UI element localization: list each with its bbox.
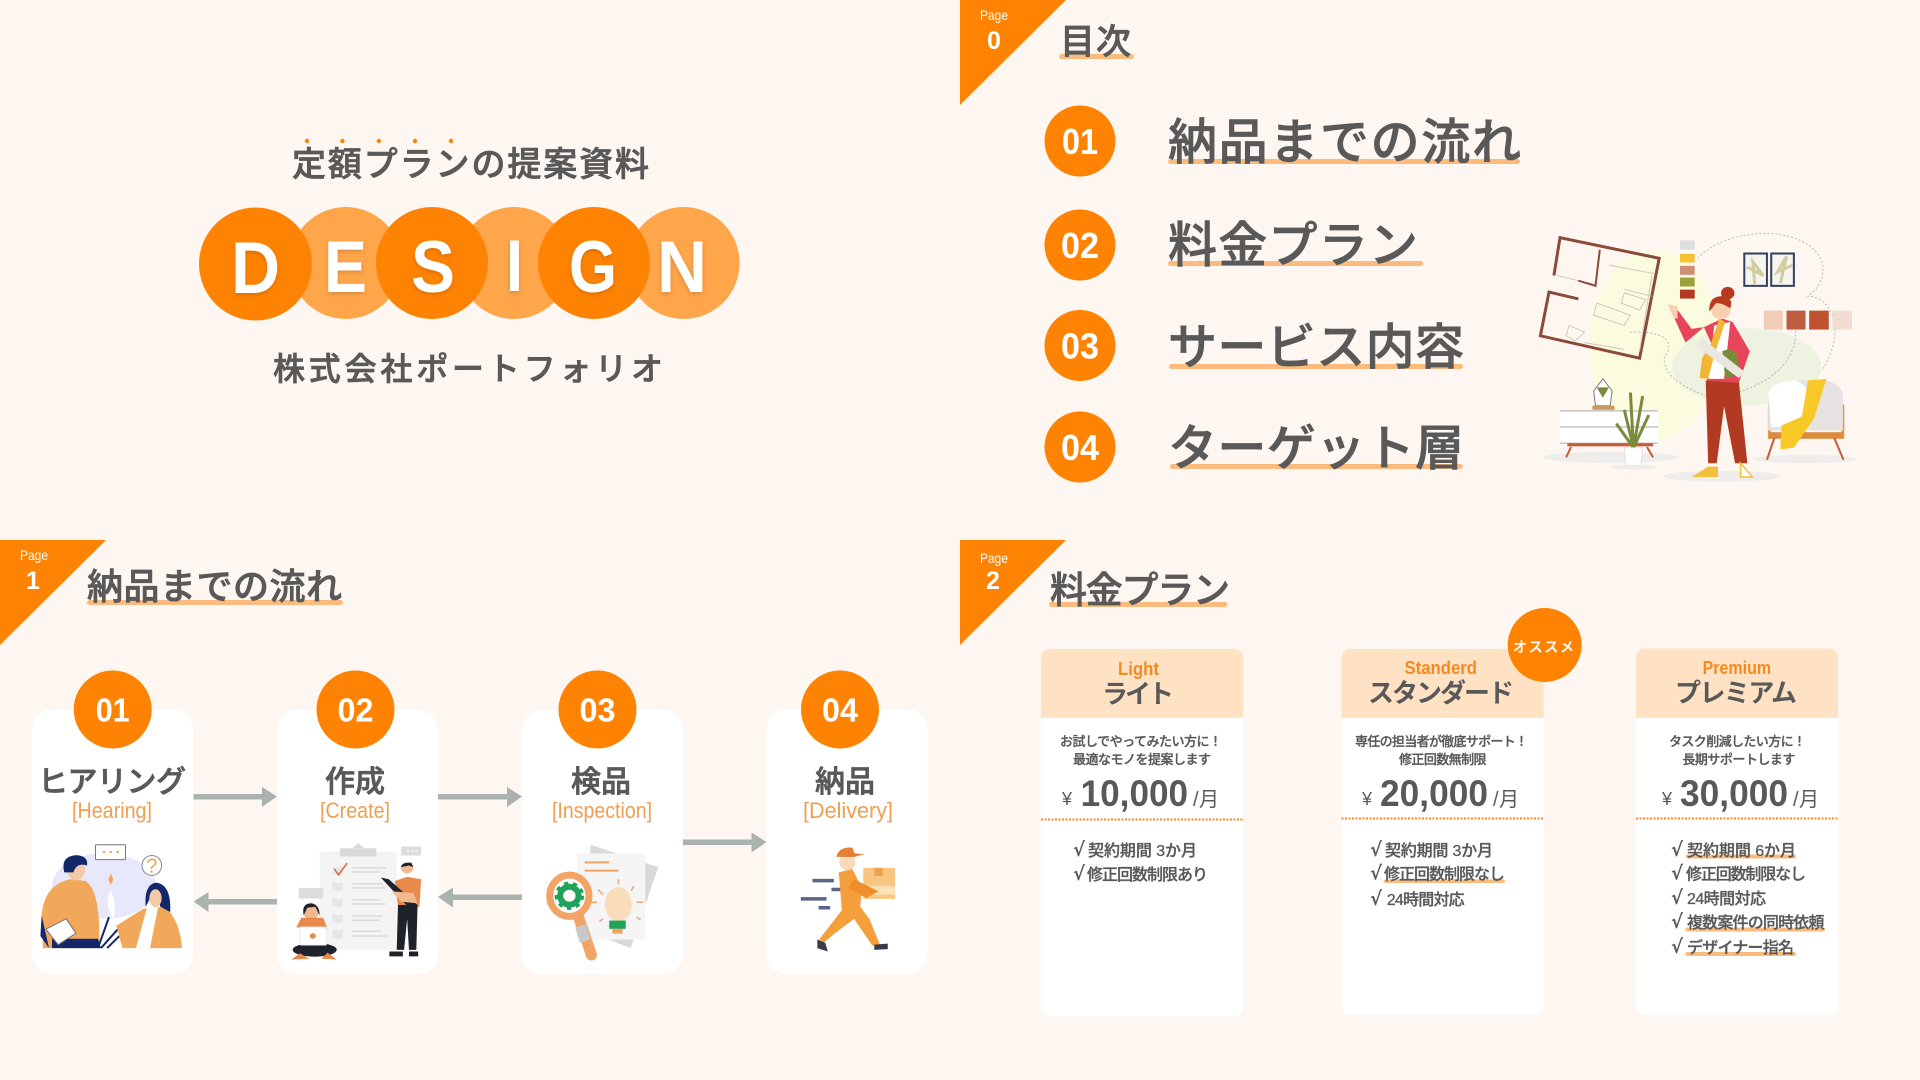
plan card: standard: √ [1370, 888, 1382, 910]
arrow: inspection to delivery [683, 832, 766, 852]
arrow: hearing to create [194, 787, 277, 807]
plan card: standard: 専任の担当者が徹底サポート！ [1355, 734, 1528, 749]
plan card: standard: 修正回数無制限 [1399, 752, 1486, 767]
plan card: premium: プレミアム [1675, 678, 1797, 708]
card: inspection [522, 670, 683, 974]
card: delivery: 04 [822, 692, 859, 728]
card: delivery: 納品 [815, 766, 875, 799]
plan card: standard: 24時間対応 [1387, 891, 1465, 909]
plan card: light [1041, 649, 1243, 1016]
page tag 2: Page [980, 550, 1008, 566]
card: inspection: [Inspection] [552, 798, 652, 823]
plan card: premium: デザイナー指名 [1687, 938, 1794, 957]
plan card: light: 10,000 [1081, 773, 1188, 814]
arrow: inspection back to create [438, 888, 522, 908]
plan card: premium: 契約期間 6か月 [1687, 842, 1796, 860]
plan card: premium: 修正回数制限なし [1686, 866, 1806, 884]
contents item 01 [1044, 106, 1521, 176]
contents item 01: 01 [1062, 121, 1098, 162]
plan card: standard: スタンダード [1368, 678, 1514, 708]
plan card: standard: /月 [1493, 789, 1519, 811]
heading: pricing plan: 料金プラン [1050, 570, 1230, 611]
DESIGN logo circles: S [411, 227, 455, 308]
plan card: premium: √ [1671, 839, 1683, 861]
contents item 03 [1044, 310, 1464, 381]
plan card: light: √ [1073, 863, 1085, 885]
plan card: premium [1636, 648, 1838, 1015]
heading: contents: 目次 [1060, 23, 1131, 62]
DESIGN logo circles: E [324, 227, 367, 308]
plan card: premium: /月 [1793, 789, 1819, 811]
panel: page 1 delivery flow [0, 540, 928, 974]
card: inspection: 検品 [571, 766, 631, 799]
DESIGN logo circles: N [657, 227, 707, 308]
arrow: create back to hearing [194, 892, 277, 912]
page tag 1: 1 [26, 567, 40, 595]
plan card: light: /月 [1193, 789, 1219, 811]
card: hearing: [Hearing] [72, 798, 152, 823]
plan card: light: 修正回数制限あり [1087, 866, 1208, 884]
card: create: [Create] [320, 798, 390, 823]
plan card: light: 最適なモノを提案します [1073, 752, 1211, 767]
plan card: premium: Premium [1703, 658, 1771, 678]
card: delivery: [Delivery] [803, 798, 893, 823]
plan card: light: 契約期間 3か月 [1088, 842, 1197, 860]
plan card: standard [1342, 649, 1544, 1015]
plan card: premium: 24時間対応 [1687, 890, 1766, 908]
page tag 0: 0 [987, 27, 1001, 55]
contents item 02: 料金プラン [1168, 219, 1418, 273]
badge: recommended: オススメ [1513, 639, 1574, 655]
contents item 03: 03 [1061, 326, 1099, 366]
plan card: premium: 長期サポートします [1682, 752, 1795, 767]
plan card: premium: タスク削減したい方に！ [1669, 734, 1806, 749]
page tag 0: Page [980, 7, 1008, 23]
plan card: light: Light [1118, 659, 1159, 679]
panel: page 2 pricing plans [960, 540, 1838, 1016]
plan card: standard: 修正回数制限なし [1384, 866, 1505, 884]
plan card: standard: 20,000 [1380, 773, 1488, 814]
page tag 2 [960, 540, 1066, 645]
company name: 株式会社ポートフォリオ [273, 351, 663, 387]
contents item 01: 納品までの流れ [1168, 116, 1521, 170]
plan card: light: ¥ [1061, 789, 1073, 809]
DESIGN logo circles [199, 207, 740, 320]
icon: running delivery person [800, 848, 896, 952]
contents item 04: 04 [1061, 427, 1099, 468]
page tag 1 [0, 540, 106, 645]
plan card: premium: √ [1671, 862, 1683, 884]
DESIGN logo circles: I [506, 226, 523, 307]
arrow: create to inspection [438, 787, 522, 807]
icon: two people talking: ? [146, 856, 157, 878]
DESIGN logo circles: G [569, 227, 617, 308]
badge: recommended [1508, 608, 1582, 682]
page tag 2: 2 [986, 567, 1000, 595]
plan card: standard: ¥ [1361, 789, 1373, 809]
contents item 02: 02 [1061, 225, 1099, 266]
contents item 04 [1044, 412, 1464, 482]
heading: delivery flow: 納品までの流れ [87, 566, 342, 607]
page tag 1: Page [20, 547, 48, 563]
card: create: 作成 [325, 766, 385, 799]
panel: page 0 table of contents [960, 0, 1857, 482]
plan card: premium: 複数案件の同時依頼 [1687, 914, 1824, 932]
icon: magnifier and light bulb [546, 845, 658, 960]
plan card: premium: √ [1671, 911, 1683, 933]
contents item 03: サービス内容 [1168, 321, 1464, 375]
plan card: premium: ¥ [1661, 789, 1673, 809]
DESIGN logo circles: D [231, 228, 280, 309]
card: inspection: 03 [580, 692, 616, 728]
plan card: standard: √ [1370, 862, 1382, 884]
plan card: premium: 30,000 [1680, 773, 1788, 814]
contents item 02 [1044, 210, 1423, 280]
card: hearing [32, 670, 193, 974]
plan card: light: ライト [1102, 679, 1174, 709]
page tag 0 [960, 0, 1066, 105]
panel: cover slide [199, 139, 740, 387]
plan card: standard: 契約期間 3か月 [1385, 842, 1493, 860]
card: create: 02 [338, 692, 374, 728]
plan card: premium: √ [1671, 936, 1683, 958]
plan card: light: お試しでやってみたい方に！ [1060, 734, 1222, 749]
icon: two people talking [40, 844, 182, 949]
plan card: premium: √ [1671, 887, 1683, 909]
card: hearing: 01 [96, 692, 130, 728]
card: create [277, 670, 438, 974]
card: delivery [766, 670, 928, 974]
icon: clipboard and two people [292, 843, 422, 960]
plan card: standard: √ [1370, 839, 1382, 861]
illustration: interior designer with floor plan [1538, 233, 1857, 482]
plan card: light: √ [1073, 839, 1085, 861]
card: hearing: ヒアリング [38, 766, 186, 799]
contents item 04: ターゲット層 [1168, 422, 1464, 476]
cover subtitle: 定額プランの提案資料 [292, 146, 649, 184]
plan card: standard: Standerd [1404, 658, 1477, 678]
